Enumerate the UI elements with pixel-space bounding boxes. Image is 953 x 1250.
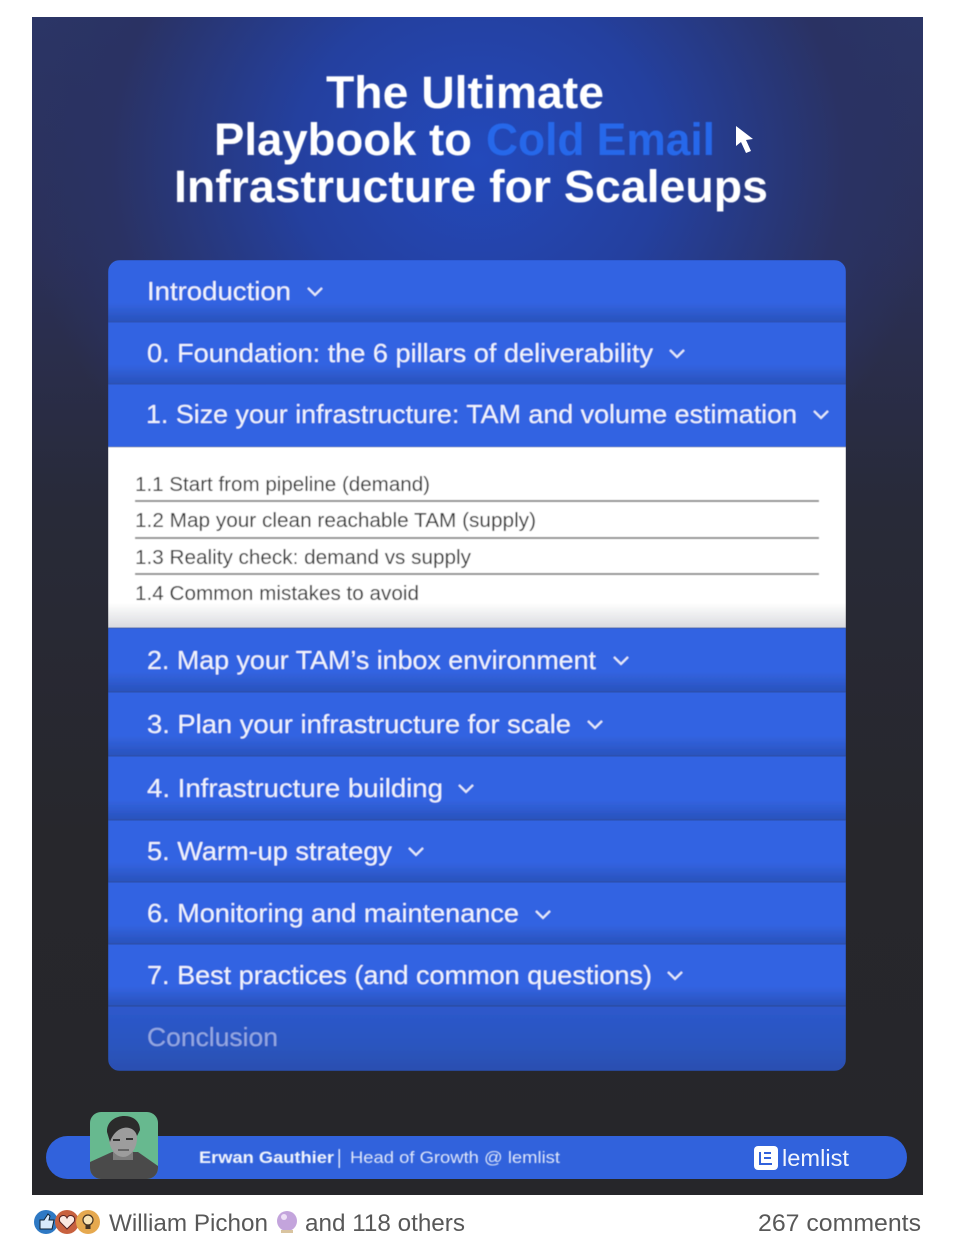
expanded section 1 sub-items: 1.2 Map your clean reachable TAM (supply) [135,510,536,532]
icon: heart [55,1210,79,1234]
author name and role [199,1148,560,1168]
row: 0. Foundation: 0. Foundation: the 6 pillars of deliverability [147,338,653,368]
row: 2. Map your TAM: 2. Map your TAM’s inbox environment [147,645,597,675]
row: 6. Monitoring and maintenance [108,882,846,944]
row: 6. Monitoring and maintenance: 6. Monitoring and maintenance [147,898,519,928]
comments count: 267 comments [758,1210,921,1237]
row: 4. Infrastructure building: 4. Infrastructure building [147,773,443,803]
row: Conclusion: Conclusion [147,1022,278,1052]
icon: like [34,1210,58,1234]
icon: lightbulb [76,1210,100,1234]
row: 7. Best practices: 7. Best practices (and common questions) [147,960,652,990]
row: 0. Foundation [108,322,846,384]
title: Playbook to [214,114,472,165]
author name and role: Erwan Gauthier [199,1148,334,1167]
icon: lemlist logo [754,1145,850,1171]
expanded section 1 sub-items: 1.1 Start from pipeline (demand) [135,474,430,496]
row: 3. Plan your infrastructure: 3. Plan your infrastructure for scale [147,709,571,739]
reaction icons [34,1210,100,1234]
row: 1. Size your infrastructure (open) [108,384,846,447]
expanded section 1 sub-items [108,447,846,628]
row: 3. Plan your infrastructure [108,692,846,756]
icon: crystal ball emoji [277,1211,297,1233]
row: Conclusion [108,1006,846,1071]
icon: lemlist logo: lemlist [782,1145,850,1171]
row: 5. Warm-up strategy: 5. Warm-up strategy [147,836,392,866]
panel: table of contents accordion [108,260,846,1071]
expanded section 1 sub-items: 1.4 Common mistakes to avoid [135,583,419,605]
row: 7. Best practices [108,944,846,1006]
reactions text [109,1210,465,1237]
row: 1. Size your infrastructure (open): 1. Size your infrastructure: TAM and volume estimation [146,399,797,429]
row: Introduction: Introduction [147,276,291,306]
icon: mouse cursor [736,126,753,153]
expanded section 1 sub-items: 1.3 Reality check: demand vs supply [135,547,471,569]
reactions text: and 118 others [305,1210,465,1237]
row: 4. Infrastructure building [108,756,846,820]
avatar: author portrait [90,1112,158,1179]
footer author bar [46,1136,907,1179]
reactions text: William Pichon [109,1210,268,1237]
title: Infrastructure for Scaleups [174,161,768,212]
row: 2. Map your TAM [108,628,846,692]
title: Cold Email [486,114,715,165]
row: Introduction [108,260,846,322]
title: The Ultimate [326,67,604,118]
title [174,67,768,212]
author name and role: Head of Growth @ lemlist [350,1148,560,1167]
row: 5. Warm-up strategy [108,820,846,882]
